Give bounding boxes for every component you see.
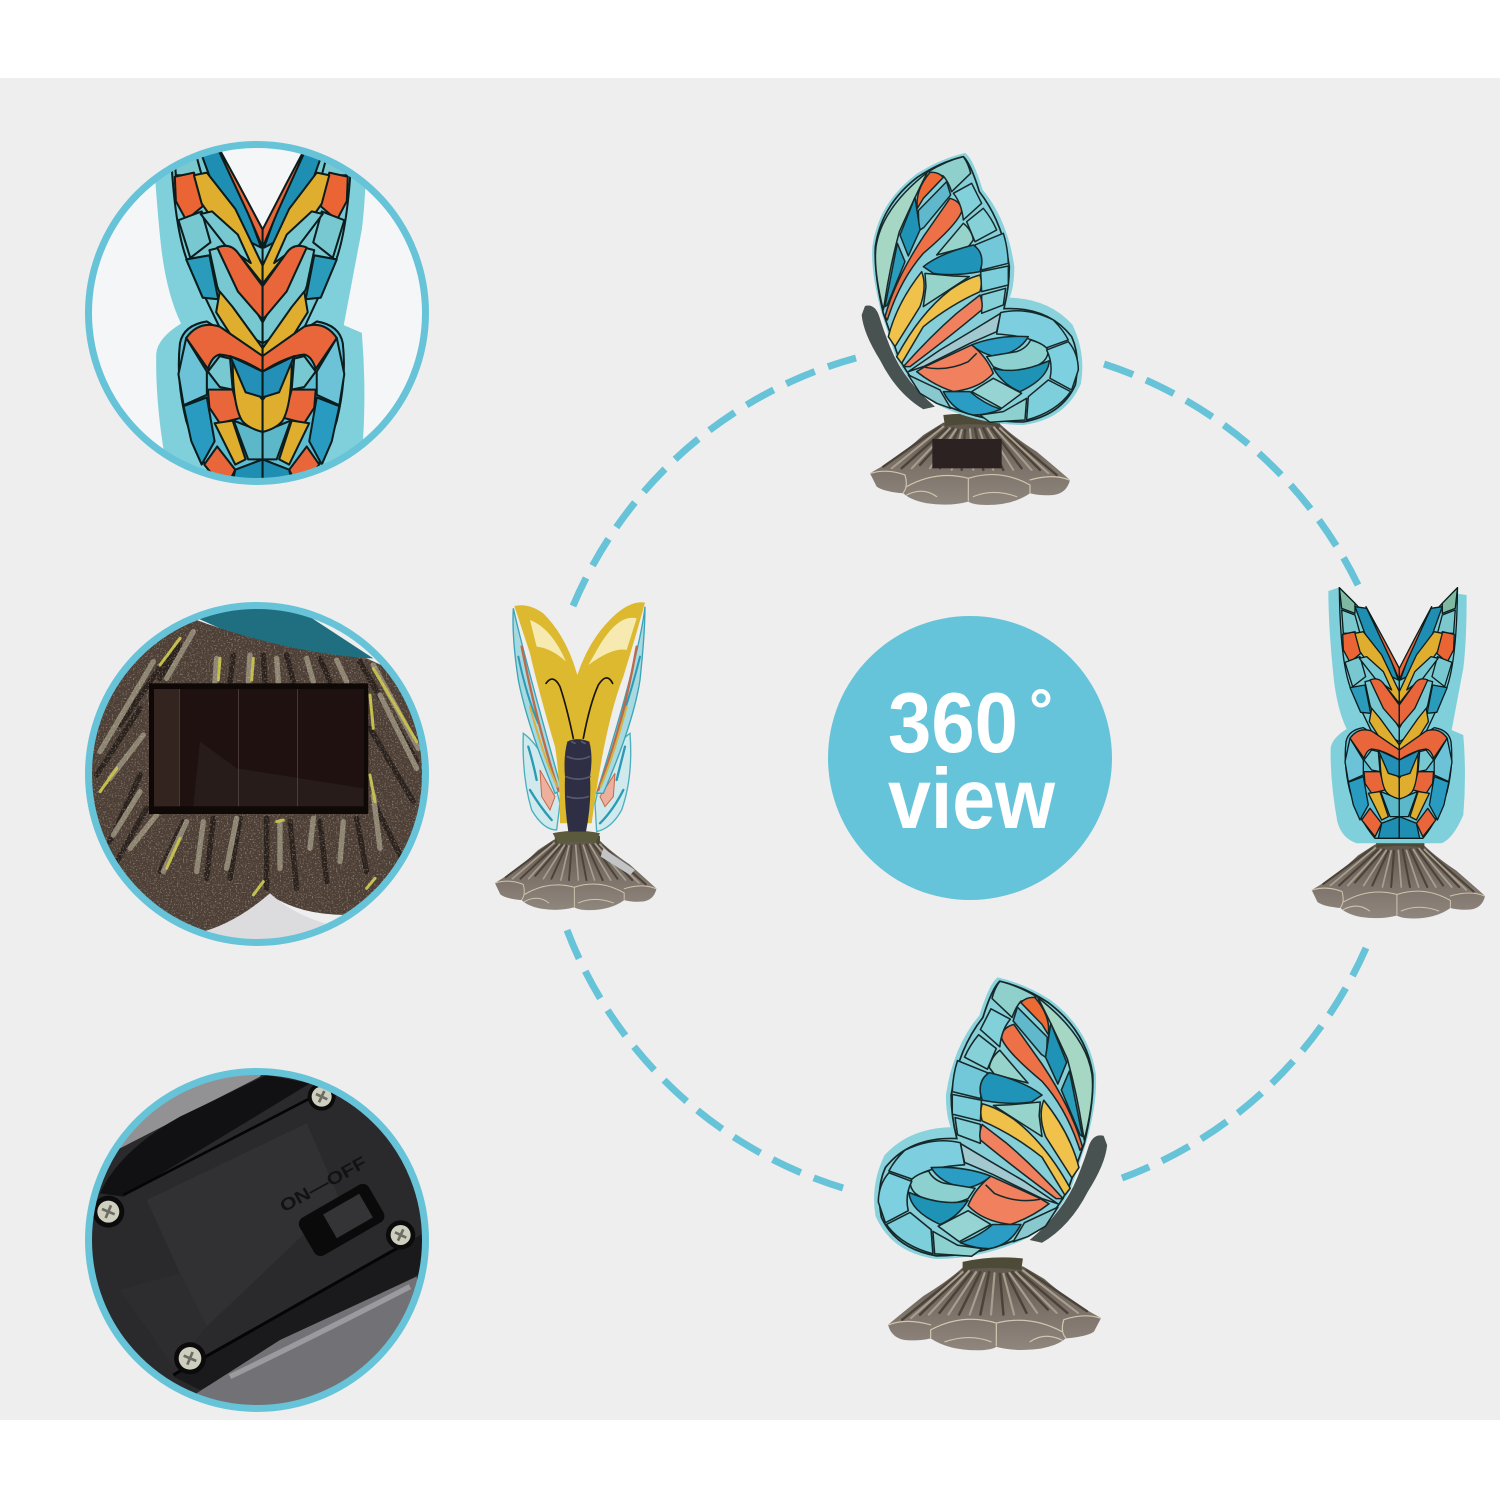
butterfly lamp: side view top <box>862 154 1081 505</box>
solar panel <box>932 439 1002 468</box>
body <box>565 739 592 832</box>
yellow inner wings <box>514 602 645 823</box>
badge: 360 view: view <box>888 752 1056 847</box>
antennae <box>546 678 613 738</box>
switch label: ON—OFF <box>276 1152 370 1216</box>
butterfly lamp: side view bottom <box>875 978 1107 1350</box>
butterfly lamp: back view right <box>1312 588 1485 918</box>
screws <box>92 1083 415 1374</box>
fore wings <box>513 607 645 793</box>
hind wings <box>523 733 631 832</box>
badge: 360 view: 360 <box>888 676 1018 771</box>
badge: 360 view <box>828 616 1112 900</box>
badge: 360 view: ° <box>1029 677 1053 744</box>
switch <box>298 1184 384 1256</box>
detail circle: wing pattern <box>85 141 429 485</box>
butterfly lamp: front view left <box>495 602 656 910</box>
dashed rotation ring <box>567 358 1366 1188</box>
detail circle: on/off switch <box>85 1068 429 1412</box>
detail circle: solar panel <box>85 602 429 946</box>
base <box>495 832 656 910</box>
